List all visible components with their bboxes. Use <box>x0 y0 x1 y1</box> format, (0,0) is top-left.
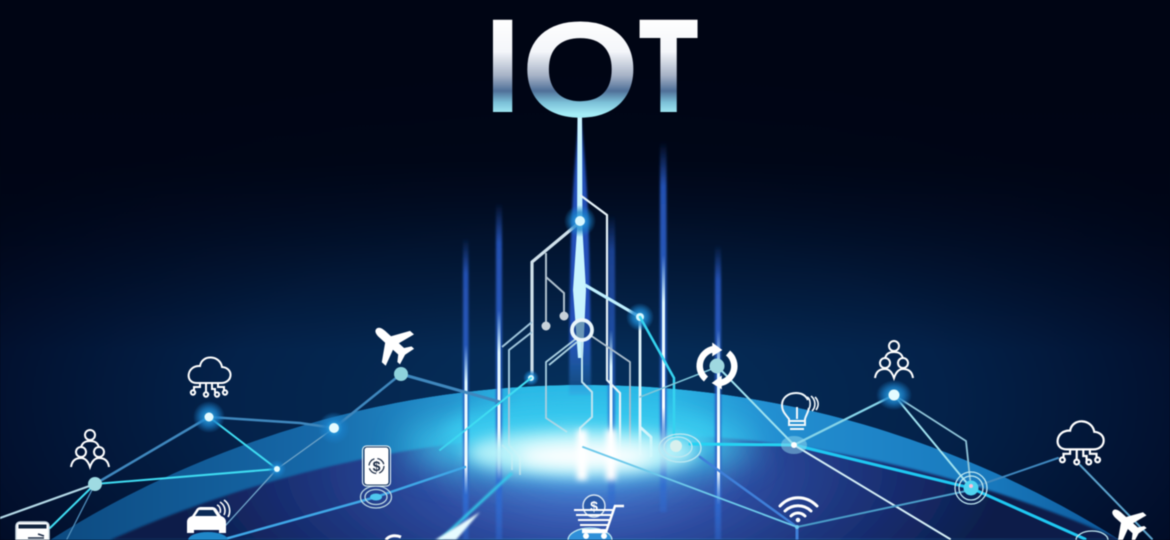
beam 3 <box>608 215 615 515</box>
node: phone ring <box>360 486 392 508</box>
circuit tree lines <box>502 195 654 475</box>
right hexagon trace <box>590 335 630 447</box>
node: center target ring <box>659 434 701 462</box>
icon: phone: $ <box>373 458 381 474</box>
icon: phone <box>362 446 390 486</box>
bright streak bottom left <box>435 473 512 540</box>
vertical light beams <box>463 113 721 540</box>
node: target ring right <box>955 472 987 504</box>
icon: sync <box>700 344 734 388</box>
top glow node <box>564 205 596 237</box>
drop trace <box>640 317 651 457</box>
cyan branch trace <box>585 285 640 317</box>
node: plane <box>394 367 408 381</box>
beam 5 <box>715 245 721 540</box>
icon: people left <box>71 430 109 467</box>
outer glow <box>467 430 697 476</box>
beam 2 <box>496 203 502 540</box>
title <box>484 0 697 141</box>
beam 4 <box>660 142 666 512</box>
node: left people <box>88 477 102 491</box>
icon: partial sync bottom <box>386 536 401 540</box>
node: plane ring right <box>1076 531 1108 540</box>
icon: shopping cart: $ <box>590 498 598 514</box>
center glow cyan <box>405 413 755 477</box>
stub end dot left <box>542 322 550 330</box>
wide cyan haze <box>446 408 714 449</box>
icon: cloud left <box>189 357 231 397</box>
node: bulb ring <box>781 436 807 454</box>
icon: plane left <box>362 313 421 372</box>
left network lines <box>0 374 531 539</box>
left main trace <box>532 222 580 378</box>
node: wifi vertex <box>795 525 799 529</box>
left glow node <box>523 370 539 386</box>
icon: people right <box>875 341 913 378</box>
right glow node <box>626 303 654 331</box>
node: left cloud <box>193 401 225 433</box>
stub end dot right <box>560 312 568 320</box>
icon: wifi <box>780 498 817 522</box>
globe rim band <box>50 385 1120 540</box>
light streak center <box>577 430 587 480</box>
right main trace <box>580 195 620 457</box>
lower left hexagon trace <box>546 338 577 432</box>
globe <box>50 385 1121 540</box>
icon: shopping cart <box>574 495 624 538</box>
node: bottom cart ring <box>568 528 612 540</box>
node: right people <box>876 380 912 410</box>
node: car ring <box>188 532 228 540</box>
icon: light bulb <box>782 393 818 429</box>
right network lines <box>583 317 1152 539</box>
icon: tablet bottom left <box>16 522 49 540</box>
short stub traces <box>546 253 564 322</box>
icon: cloud right <box>1058 421 1104 464</box>
title: O <box>524 0 636 140</box>
node: small bright <box>268 460 286 478</box>
light streak right <box>606 430 616 480</box>
lower center trace <box>580 340 592 447</box>
icon: plane right <box>1101 497 1153 540</box>
central bright core <box>573 113 586 358</box>
beam 1 <box>463 238 468 540</box>
bright center glow <box>467 430 697 480</box>
white core glow <box>517 444 653 468</box>
central wide beam <box>569 118 591 395</box>
globe inner surface <box>110 433 1121 540</box>
node: rim glow <box>318 412 350 444</box>
icon: car <box>187 500 230 533</box>
circuit ring <box>572 320 592 340</box>
side traces left <box>502 322 532 475</box>
